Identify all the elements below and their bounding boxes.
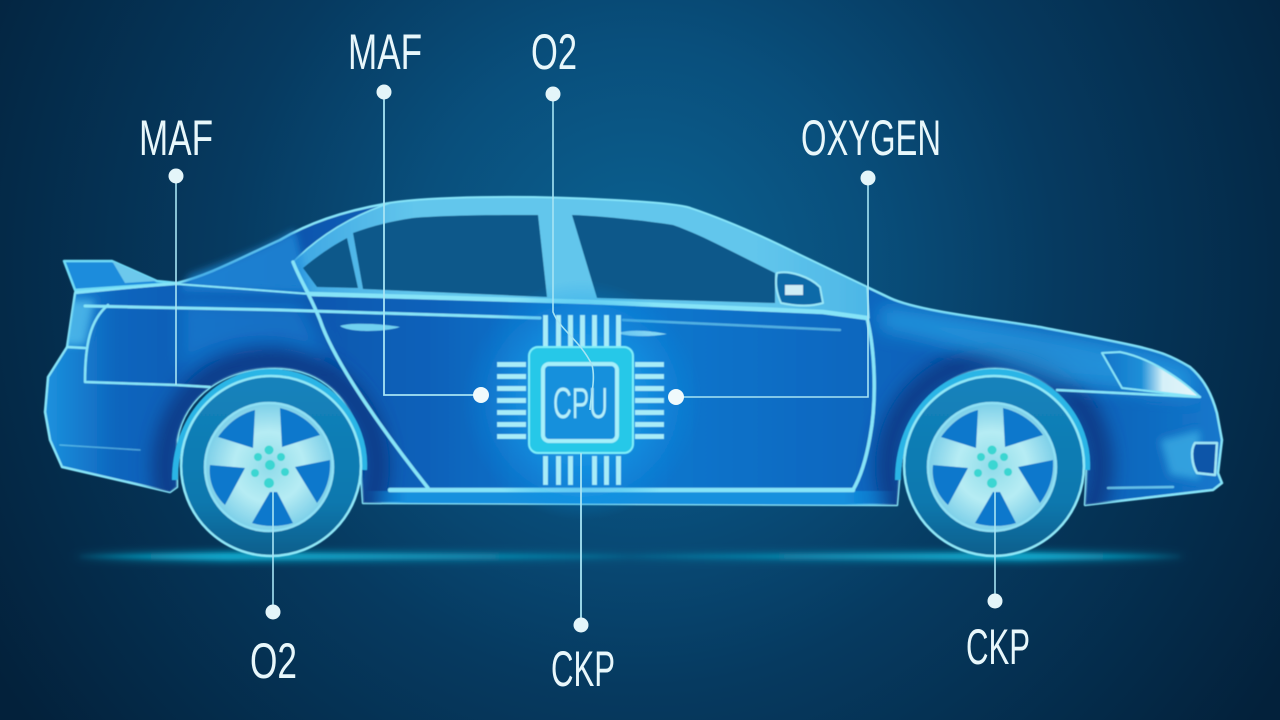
headlight bbox=[1102, 352, 1200, 397]
connector: CKP center bbox=[574, 453, 588, 632]
ground glow bbox=[70, 552, 1190, 561]
cabin frame bbox=[293, 197, 869, 318]
label: OXYGEN: OXYGEN bbox=[801, 110, 941, 166]
door mirror bbox=[776, 272, 823, 306]
label: O2 bottom: O2 bbox=[250, 633, 297, 689]
label: MAF top: MAF bbox=[348, 24, 422, 80]
rear door handle bbox=[340, 324, 400, 331]
car illustration bbox=[45, 197, 1222, 572]
cpu die bbox=[543, 364, 617, 441]
connector: MAF rear bbox=[168, 168, 184, 385]
label: CKP center: CKP bbox=[551, 641, 615, 697]
cpu package bbox=[529, 347, 633, 453]
body character lines bbox=[60, 262, 1200, 490]
cpu chip bbox=[462, 280, 702, 520]
connector: O2 top bbox=[546, 86, 593, 410]
rear door window bbox=[353, 215, 547, 297]
rear quarter window bbox=[303, 238, 358, 288]
cpu glow bbox=[462, 280, 702, 520]
car spoiler bbox=[64, 261, 177, 290]
cabin fade toward trunk bbox=[180, 230, 310, 294]
connector: CKP front bbox=[988, 490, 1002, 608]
connector: O2 bottom bbox=[266, 490, 280, 620]
car body bbox=[45, 197, 1222, 505]
body shading clipped to the body bbox=[60, 300, 1200, 572]
label: CKP front: CKP bbox=[966, 619, 1030, 675]
front wheel bbox=[898, 372, 1087, 556]
rear wheel bbox=[175, 372, 364, 556]
connector: OXYGEN bbox=[668, 170, 876, 405]
label: O2 top: O2 bbox=[531, 24, 577, 80]
cpu pins bbox=[497, 315, 664, 485]
front air intake bbox=[1192, 443, 1217, 475]
front door handle bbox=[617, 331, 667, 336]
front door window bbox=[572, 215, 775, 303]
label: MAF rear: MAF bbox=[139, 110, 213, 166]
cpu label: CPU bbox=[553, 379, 608, 428]
connector: MAF door bbox=[376, 84, 489, 403]
